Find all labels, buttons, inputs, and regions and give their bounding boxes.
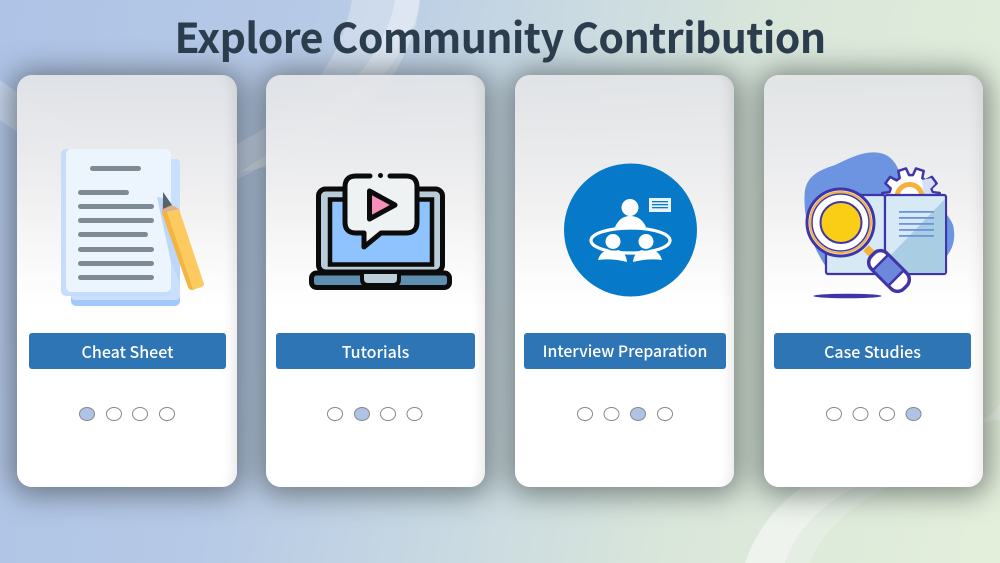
button: tutorials: Tutorials	[342, 339, 409, 363]
panel: tutorials	[266, 75, 485, 487]
title: Explore Community Contribution	[174, 5, 826, 65]
button: tutorials	[276, 333, 475, 369]
button: interview preparation: Interview Preparation	[543, 339, 707, 362]
icon: laptop with video bubble	[309, 173, 452, 290]
button: cheat sheet: Cheat Sheet	[82, 339, 173, 363]
pagination dots	[79, 407, 175, 421]
button: case studies: Case Studies	[824, 339, 921, 363]
button: interview preparation	[524, 333, 726, 369]
pagination dots	[577, 407, 673, 421]
pagination dots	[826, 407, 922, 421]
button: cheat sheet	[29, 333, 226, 369]
panel: interview preparation	[515, 75, 734, 487]
pagination dots	[327, 407, 422, 421]
panel: case studies	[764, 75, 983, 487]
button: case studies	[774, 333, 971, 369]
icon: meeting circle	[564, 164, 697, 296]
icon: document and pencil	[61, 149, 204, 306]
panel: cheat sheet	[17, 75, 237, 487]
icon: book, gear and magnifier	[804, 152, 954, 298]
